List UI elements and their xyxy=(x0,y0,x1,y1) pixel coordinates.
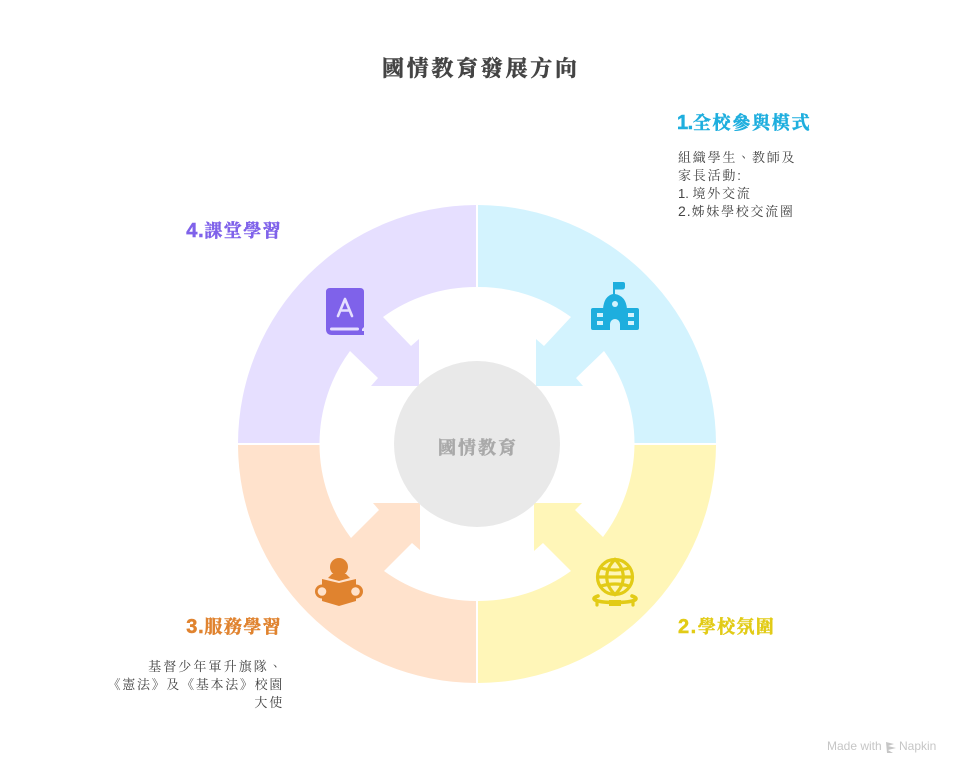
icon: book with letter A xyxy=(326,288,364,335)
centre circle xyxy=(394,361,560,527)
segment: service learning, peach xyxy=(238,445,476,683)
text: whole school details: 家長活動: xyxy=(678,168,743,183)
segment: classroom learning, lavender xyxy=(238,205,476,443)
icon: napkin logo xyxy=(886,742,896,753)
segment: whole school, blue xyxy=(478,205,716,443)
text: whole school details: 1. 境外交流 xyxy=(678,186,752,201)
title: 國情教育發展方向 xyxy=(382,56,580,81)
text: whole school details: 2.姊妹學校交流圈 xyxy=(678,203,795,219)
icon: person reading xyxy=(315,558,363,606)
text: service learning details: 《憲法》及《基本法》校園 xyxy=(108,677,284,692)
text: whole school details xyxy=(678,150,796,219)
text: service learning details: 基督少年軍升旗隊、 xyxy=(148,659,284,674)
heading: 1 whole school model: 1.全校參與模式 xyxy=(677,112,812,134)
text: whole school details: 組織學生、教師及 xyxy=(678,150,796,165)
heading: 2 school climate: 2.學校氛圍 xyxy=(678,616,775,638)
segment: school climate, yellow xyxy=(478,445,716,683)
icon: school xyxy=(591,282,639,330)
heading: 4 classroom learning: 4.課堂學習 xyxy=(186,220,282,242)
watermark: made with Napkin: Made with xyxy=(827,739,882,753)
heading: 3 service learning: 3.服務學習 xyxy=(186,616,282,638)
watermark: made with Napkin xyxy=(827,739,936,753)
watermark: made with Napkin: Napkin xyxy=(899,739,936,753)
text: service learning details xyxy=(108,659,284,710)
text: service learning details: 大使 xyxy=(254,695,284,710)
centre label: 國情教育 xyxy=(438,438,518,458)
icon: globe on stand xyxy=(594,560,636,606)
